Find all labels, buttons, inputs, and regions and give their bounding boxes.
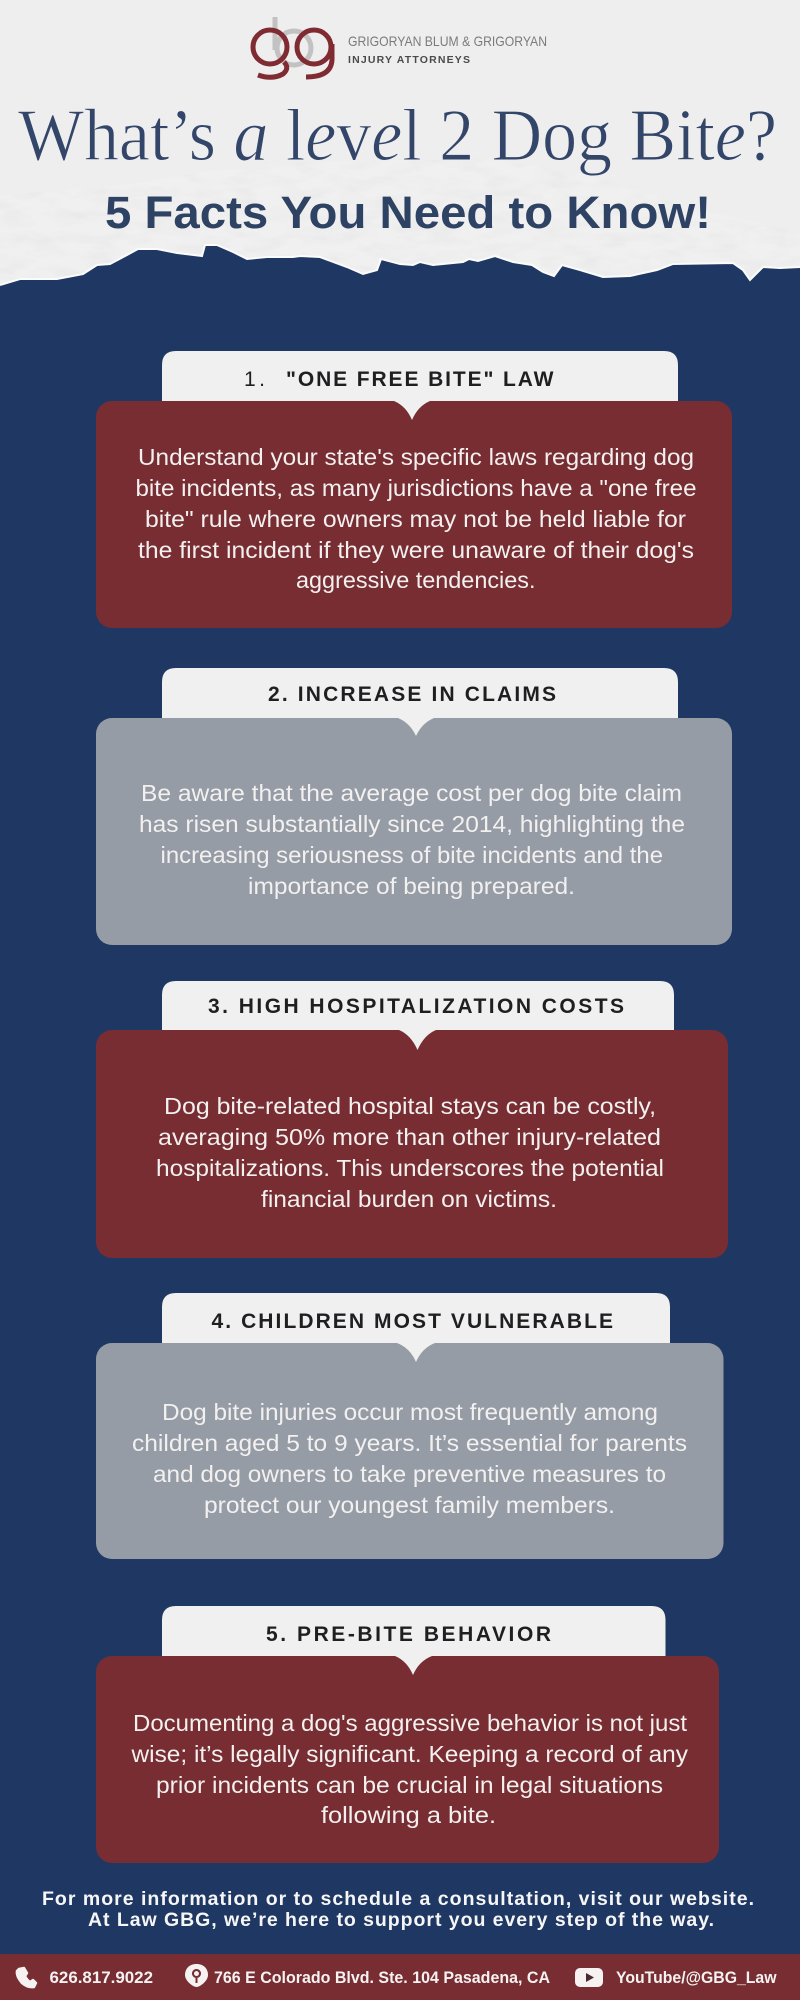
body text: Dog bite-related hospital stays can be costly, [164,1093,656,1119]
body text: has risen substantially since 2014, highlighting the [139,811,685,837]
card body [96,1656,719,1863]
logo name: GRIGORYAN BLUM & GRIGORYAN [348,33,547,49]
body text: Understand your state's specific laws regarding dog [138,444,694,470]
body text: hospitalizations. This underscores the potential [156,1155,664,1181]
heading tab [162,1293,670,1344]
pointer [397,1343,435,1362]
closing message [42,1888,754,1931]
heading: 3. HIGH HOSPITALIZATION COSTS [208,995,624,1018]
body text: Dog bite injuries occur most frequently among [162,1399,658,1425]
closing message: At Law GBG, we’re here to support you every step of the way. [88,1909,714,1931]
heading tab [162,668,678,719]
body text: bite incidents, as many jurisdictions have a "one free [136,475,696,501]
logo tagline: INJURY ATTORNEYS [348,54,470,66]
icon: phone [17,1968,36,1987]
logo mark [253,17,332,77]
pointer [394,401,430,420]
body text: children aged 5 to 9 years. It’s essential for parents [132,1430,687,1456]
body text [156,1093,664,1212]
footer contact bar [0,1954,800,2000]
youtube handle: YouTube/@GBG_Law [616,1968,777,1987]
body text: the first incident if they were unaware of their dog's [138,537,694,563]
heading tab [162,351,678,402]
subtitle: 5 Facts You Need to Know! [105,187,711,238]
body text: following a bite. [321,1802,496,1828]
body text: importance of being prepared. [248,873,575,899]
header: torn paper [0,0,800,300]
pointer [395,1656,432,1675]
icon: video [575,1968,603,1987]
heading: 4. CHILDREN MOST VULNERABLE [212,1310,613,1333]
body text: averaging 50% more than other injury-related [158,1124,661,1150]
body text [130,1710,689,1828]
phone number: 626.817.9022 [50,1968,153,1987]
body text [136,444,696,593]
body text: increasing seriousness of bite incidents and the [160,842,663,868]
heading tab [162,981,674,1031]
body text: Be aware that the average cost per dog bite claim [141,780,682,806]
pointer [399,1030,436,1050]
body text: bite" rule where owners may not be held liable for [145,506,686,532]
body text [132,1399,687,1518]
body text: financial burden on victims. [261,1186,557,1212]
panel: fact 2 [96,668,732,945]
body text: Documenting a dog's aggressive behavior is not just [133,1710,688,1736]
heading: 1. [244,368,265,391]
body text: prior incidents can be crucial in legal situations [156,1772,663,1798]
body text [139,780,685,899]
card body [96,401,732,628]
pointer [398,718,434,736]
closing message: For more information or to schedule a consultation, visit our website. [42,1888,754,1910]
heading: 5. PRE-BITE BEHAVIOR [266,1623,551,1646]
heading tab [162,1606,666,1657]
panel: fact 1 [96,351,732,628]
body text: aggressive tendencies. [296,567,536,593]
panel: fact 4 [96,1293,724,1559]
panel: fact 5 [96,1606,719,1863]
body text: protect our youngest family members. [204,1492,615,1518]
panel: fact 3 [96,981,728,1258]
body text: wise; it’s legally significant. Keeping a record of any [130,1741,689,1767]
card body [96,1343,724,1559]
address: 766 E Colorado Blvd. Ste. 104 Pasadena, CA [214,1968,550,1987]
heading: "ONE FREE BITE" LAW [286,368,554,391]
title: What’s a level 2 Dog Bite? [18,95,777,177]
icon: map pin [185,1964,208,1987]
body text: and dog owners to take preventive measures to [153,1461,666,1487]
logo [253,17,547,77]
heading: 2. INCREASE IN CLAIMS [268,683,556,706]
card body [96,718,732,945]
card body [96,1030,728,1258]
